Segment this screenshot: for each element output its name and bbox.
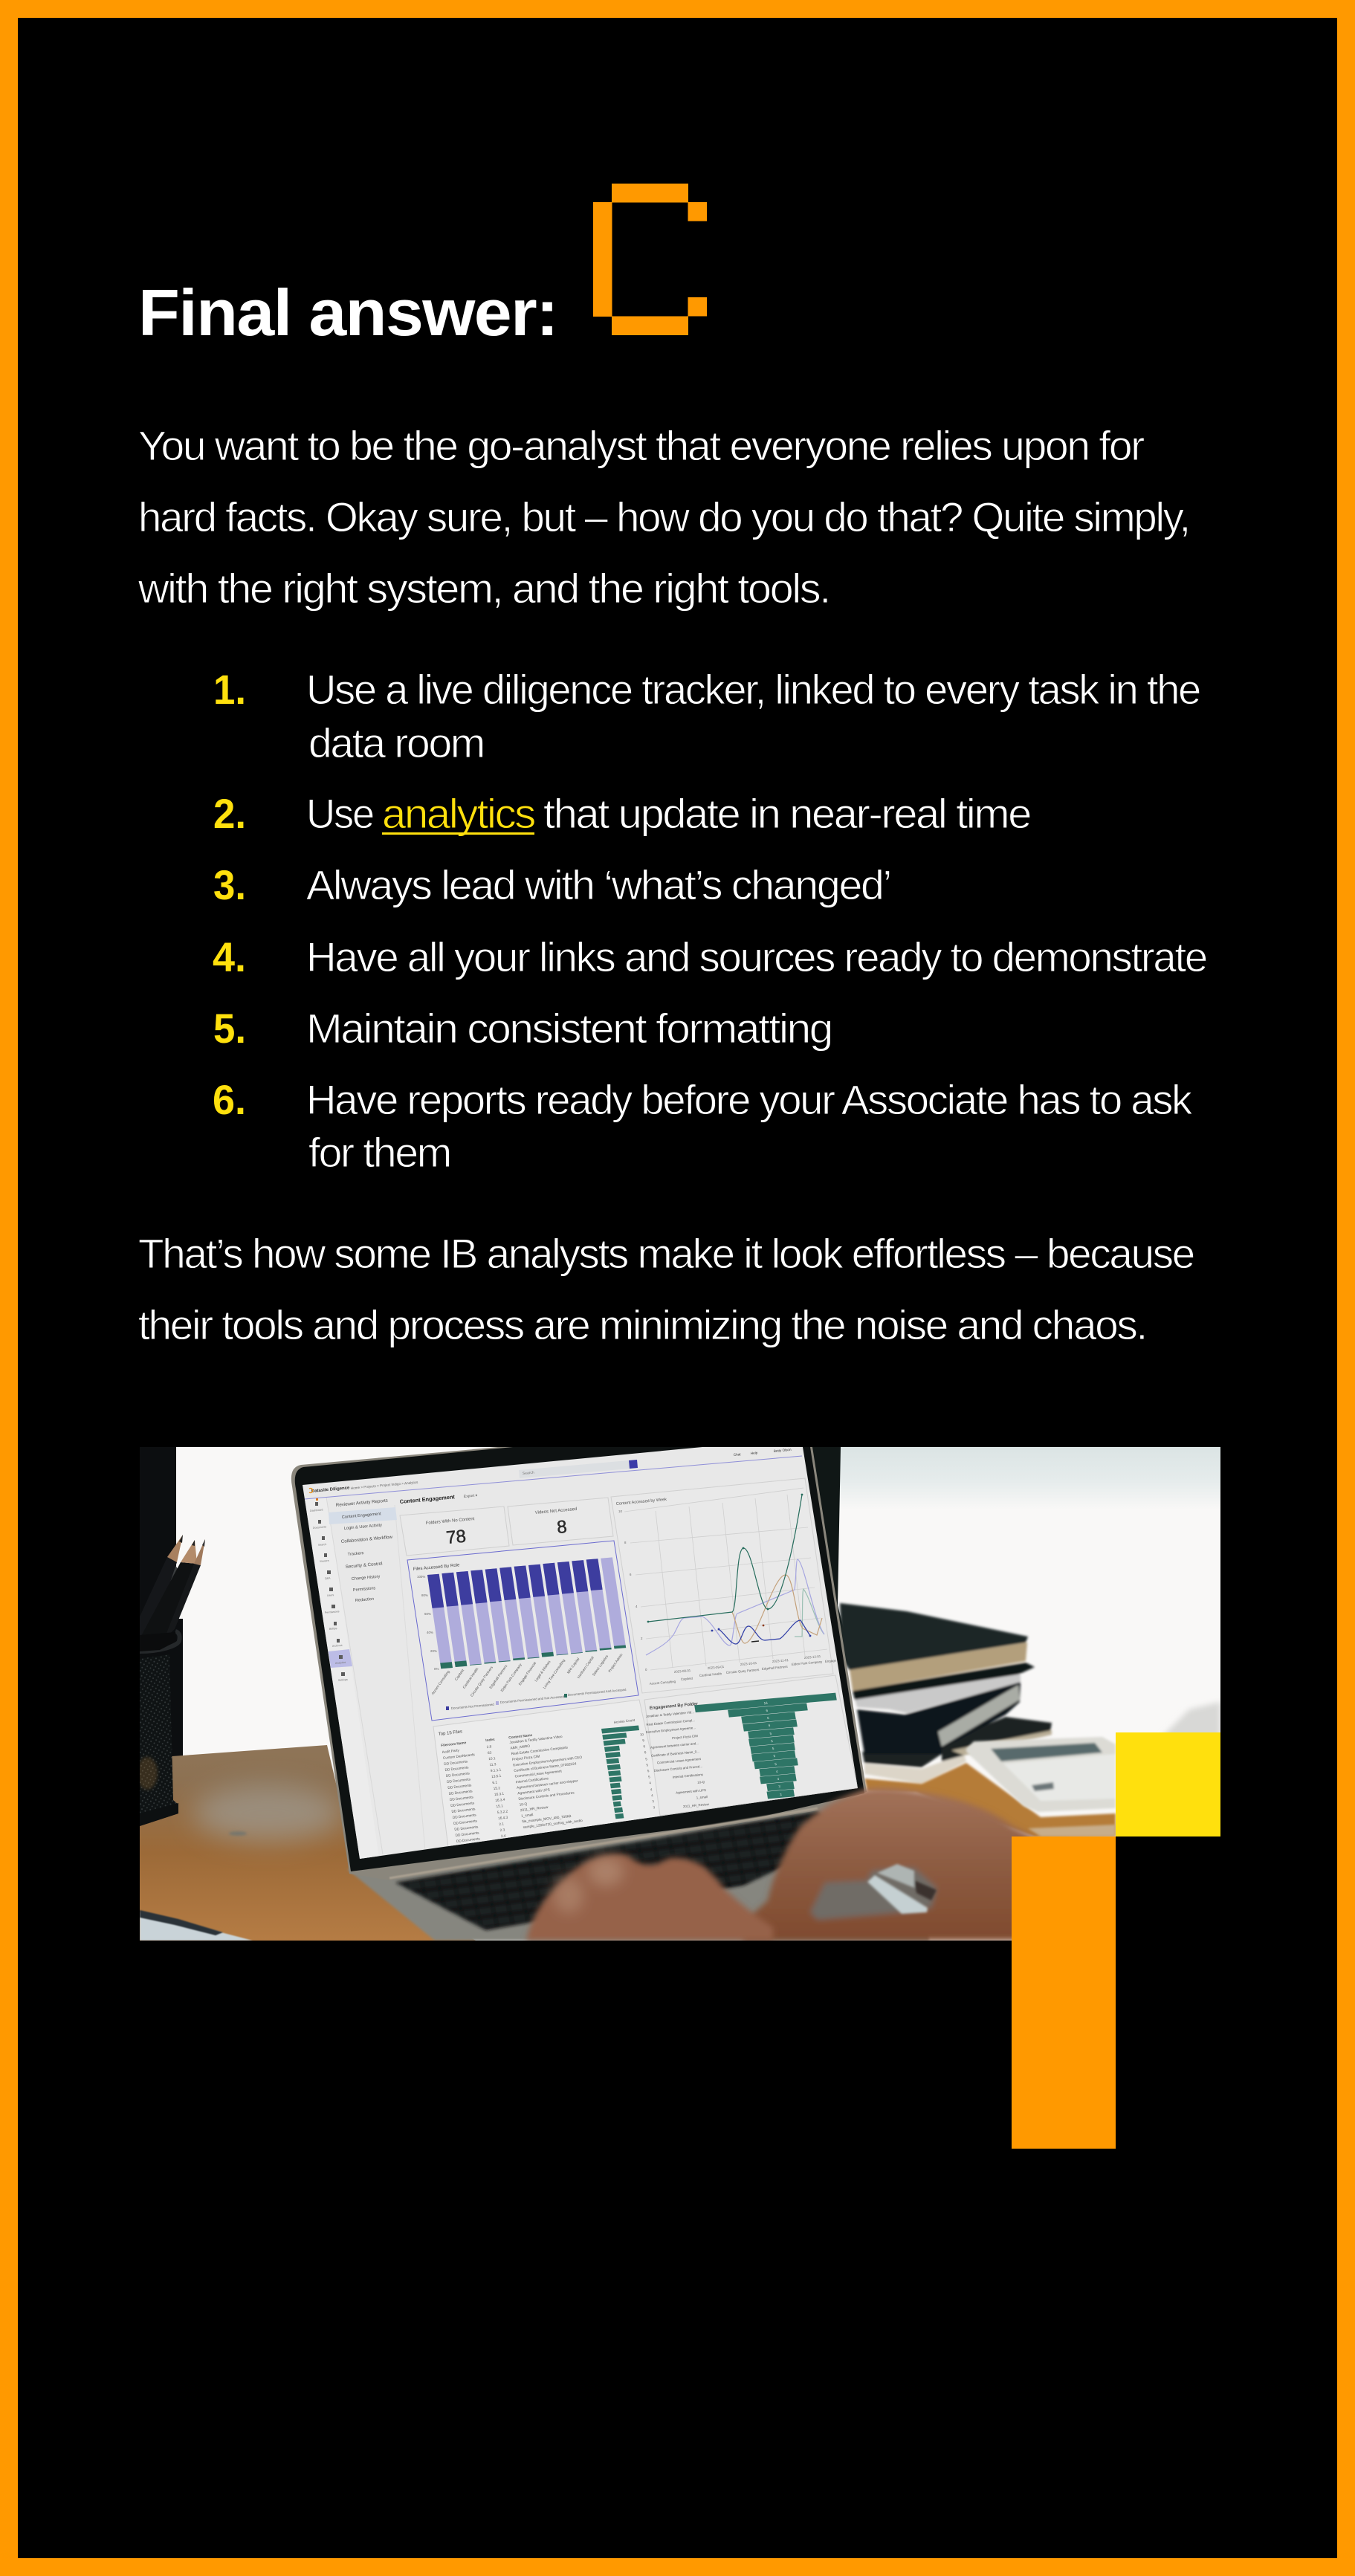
stacked bar chart: Files Accessed By Role: Documents Permissioned and Not Accessed (500, 1695, 565, 1704)
table: Top 15 Files: DD Documents (444, 1759, 468, 1767)
funnel chart: Engagement By Folder: Agreement with UPS (676, 1788, 706, 1795)
table: Top 15 Files: Agreement between carrier and shipper (517, 1779, 578, 1790)
KPI card: Folders With No Content 78: 78 (445, 1527, 467, 1548)
page title: Content Engagement: Export ▾ (464, 1493, 478, 1499)
funnel chart: Engagement By Folder: Internal Certifications (673, 1773, 704, 1779)
table: Top 15 Files (433, 1699, 664, 1846)
line chart: Content Accessed by Week: 2023-08-01 (674, 1669, 691, 1674)
table: Top 15 Files: DD Documents (455, 1831, 480, 1838)
stacked bar chart: Files Accessed By Role: Cardinal Health (462, 1667, 480, 1689)
table: Top 15 Files: sample_1280x720_surfing_with_audio (523, 1819, 583, 1830)
list item 4: 4. (213, 933, 246, 980)
table: Top 15 Files: file_example_MOV_480_700kB (522, 1814, 572, 1824)
table: Top 15 Files: 16.3.4 (495, 1798, 505, 1803)
funnel chart: Engagement By Folder: Certificate of Business Name_0... (651, 1750, 699, 1758)
list item 6 (213, 1076, 1193, 1176)
table: Top 15 Files: DD Documents (444, 1765, 470, 1773)
table: Top 15 Files: 6.1 (492, 1780, 498, 1785)
table: Top 15 Files: 2.4 (501, 1834, 506, 1839)
calculator (966, 1737, 1116, 1812)
dashboard sidebar: Analytics (335, 1661, 346, 1665)
list item 3: Always lead with ‘what’s changed’ (306, 861, 890, 908)
stacked bar chart: Files Accessed By Role: 60% (424, 1612, 431, 1616)
funnel chart: Engagement By Folder: 4 (776, 1770, 778, 1773)
table: Top 15 Files: 5 (646, 1763, 649, 1767)
title: Final answer: (138, 276, 557, 349)
stacked bar chart: Files Accessed By Role: 100% (417, 1575, 425, 1579)
line chart: Content Accessed by Week: Circular Quay Partners (726, 1668, 760, 1674)
table: Top 15 Files: Jonathan & Teddy Valentine Video (509, 1735, 563, 1745)
list item 2: Use (306, 790, 373, 837)
orange accent block (1012, 1836, 1116, 2149)
funnel chart: Engagement By Folder: 5 (774, 1762, 777, 1766)
photo: analyst using laptop with analytics dashboard (137, 1447, 1220, 1941)
yellow accent block (1116, 1732, 1220, 1836)
stacked bar chart: Files Accessed By Role: Legal & Wishes (534, 1660, 552, 1683)
table: Top 15 Files: 5 (645, 1757, 648, 1761)
table: Top 15 Files: Project Pizza CIM (512, 1755, 540, 1762)
table: Top 15 Files: Content Name (508, 1733, 533, 1741)
table: Top 15 Files: 4 (651, 1793, 653, 1797)
stacked bar chart: Files Accessed By Role: 0% (434, 1667, 439, 1671)
line chart: Content Accessed by Week: 4 (636, 1605, 638, 1608)
laptop base (347, 1795, 929, 1941)
laptop keyboard (395, 1811, 847, 1930)
pale tint at top of right window (840, 1447, 1220, 1498)
line chart: Content Accessed by Week: Engage (825, 1659, 837, 1663)
funnel chart: Engagement By Folder: Jonathan & Teddy Valentine Vid... (645, 1710, 694, 1718)
wooden desk left (140, 1745, 476, 1941)
closing paragraph (138, 1230, 1194, 1348)
dashboard sidebar: Collaboration & Workflow (341, 1535, 393, 1544)
funnel chart: Engagement By Folder: 4 (777, 1777, 780, 1781)
table: Top 15 Files: 6 (643, 1744, 646, 1748)
funnel chart: Engagement By Folder: 10-Q (697, 1780, 705, 1784)
stacked bar chart: Files Accessed By Role: 40% (427, 1631, 433, 1634)
list item 5: 5. (213, 1005, 246, 1052)
funnel chart: Engagement By Folder: Commercial Lease Agreement (657, 1757, 702, 1764)
table: Top 15 Files: 15.2 (493, 1786, 501, 1791)
list item 2: 2. (213, 790, 246, 837)
table: Top 15 Files: DD Documents (456, 1836, 481, 1844)
trackpad highlight (867, 1864, 937, 1914)
dashboard sidebar: Users (327, 1593, 334, 1597)
dashboard sidebar: Bitflips (329, 1627, 337, 1631)
dashboard sidebar: Security & Control (346, 1562, 383, 1570)
table: Top 15 Files: 16.4.3 (498, 1816, 508, 1821)
funnel chart: Engagement By Folder: 5 (772, 1747, 774, 1750)
line chart: Content Accessed by Week: Accent Consulting (650, 1680, 676, 1686)
funnel chart: Engagement By Folder: 3 (778, 1784, 781, 1788)
stacked bar chart: Files Accessed By Role: Project Admin (608, 1653, 624, 1674)
line chart: Content Accessed by Week: 2023-10-01 (740, 1661, 757, 1666)
table: Top 15 Files: 11.3 (489, 1762, 497, 1767)
dashboard sidebar: Content Engagement (342, 1512, 381, 1520)
page title: Content Engagement: Content Engagement (399, 1493, 456, 1505)
stacked bar chart: Files Accessed By Role: Select Logistics (592, 1654, 609, 1677)
table: Top 15 Files: 5 (647, 1769, 650, 1773)
table: Top 15 Files: DD Documents (447, 1777, 471, 1784)
list item 2: that update in near-real time (543, 790, 1030, 837)
table: Top 15 Files: 6 (644, 1750, 647, 1754)
KPI card: Videos Not Accessed 8: Videos Not Accessed (535, 1507, 578, 1515)
funnel chart: Engagement By Folder: 6 (767, 1716, 770, 1720)
table: Top 15 Files: DD Documents (450, 1801, 475, 1808)
table: Top 15 Files: Internal Certifications (515, 1776, 549, 1784)
dashboard screen content (305, 1448, 858, 1865)
KPI card: Videos Not Accessed 8: 8 (556, 1517, 568, 1538)
table: Top 15 Files: DD Documents (452, 1813, 477, 1820)
table: Top 15 Files: DD Documents (445, 1771, 470, 1779)
line chart: Content Accessed by Week: 2023-11-01 (772, 1658, 789, 1663)
dashboard header: Betty Olson (774, 1448, 792, 1453)
table: Top 15 Files: Executive Employment Agreement with CEO (513, 1755, 583, 1767)
table: Top 15 Files: 10 (640, 1732, 644, 1736)
stacked bar chart: Files Accessed By Role: 20% (430, 1649, 437, 1653)
dashboard sidebar: Change History (352, 1575, 381, 1582)
funnel chart: Engagement By Folder: 6 (766, 1709, 769, 1712)
funnel chart: Engagement By Folder: Agreement between carrier and... (650, 1741, 699, 1750)
stacked bar chart: Files Accessed By Role: Engage Financial (518, 1661, 537, 1686)
KPI card: Videos Not Accessed 8 (508, 1498, 613, 1545)
funnel chart: Engagement By Folder: 2011_HR_Review (683, 1802, 710, 1808)
typing hand: left (526, 1854, 773, 1941)
table: Top 15 Files: 9.1.1.1 (490, 1767, 502, 1773)
stacked bar chart: Files Accessed By Role: Elden Park Company (500, 1663, 523, 1693)
stacked bar chart: Files Accessed By Role: Edgehall Partners (488, 1664, 509, 1690)
dashboard sidebar: Documents (313, 1525, 326, 1530)
stacked bar chart: Files Accessed By Role: Circular Quay Partners (470, 1666, 494, 1698)
line chart: Content Accessed by Week: 6 (630, 1573, 632, 1576)
table: Top 15 Files: 9 (642, 1738, 645, 1742)
line chart: Content Accessed by Week: 2023-12-01 (804, 1654, 821, 1660)
stacked bar chart: Files Accessed By Role: Capitest (454, 1668, 465, 1682)
line chart: Content Accessed by Week: Capitest (681, 1676, 693, 1681)
table: Top 15 Files: 63 (488, 1750, 492, 1755)
funnel chart: Engagement By Folder: Project Pizza CIM (672, 1734, 698, 1740)
table: Top 15 Files: Commercial Lease Agreement (514, 1769, 563, 1779)
dashboard sidebar (305, 1497, 425, 1859)
table: Top 15 Files: Audit Party (442, 1748, 460, 1755)
cut-out: black corner below yellow block (1116, 1836, 1220, 1941)
closing paragraph: That’s how some IB analysts make it look effortless – because (138, 1230, 1194, 1277)
table: Top 15 Files: 15.1 (496, 1804, 504, 1809)
dashboard sidebar: Dashboard (310, 1508, 323, 1512)
table: Top 15 Files: DD Documents (447, 1783, 472, 1790)
funnel chart: Engagement By Folder: Executive Employment Agreeme... (646, 1726, 696, 1734)
table: Top 15 Files: Real Estate Commission Complaints (511, 1745, 569, 1756)
dashboard header (305, 1448, 802, 1499)
dashboard sidebar: Redaction (355, 1597, 374, 1603)
desk surface right (864, 1763, 1116, 1837)
table: Top 15 Files: 10-Q (519, 1802, 528, 1808)
dashboard sidebar: Permissions (325, 1610, 340, 1614)
table: Top 15 Files: 10.1 (488, 1756, 496, 1761)
stacked bar chart: Files Accessed By Role: Files Accessed By Role (413, 1563, 460, 1572)
table: Top 15 Files: Index (485, 1738, 495, 1743)
line chart: Content Accessed by Week: Content Accessed by Week (616, 1498, 667, 1507)
funnel chart: Engagement By Folder: 5 (773, 1754, 776, 1758)
table: Top 15 Files: DD Documents (448, 1789, 473, 1796)
stacked bar chart: Files Accessed By Role: Northern Capital (577, 1656, 595, 1680)
line chart: Content Accessed by Week: Edgehall Partners (762, 1665, 789, 1671)
icon: pixel letter C logo (593, 184, 707, 335)
line chart: Content Accessed by Week: 2023-09-01 (708, 1665, 725, 1670)
list item 3: 3. (213, 861, 246, 908)
dark post behind laptop (812, 1447, 844, 1644)
photo background: bright window (140, 1447, 1220, 1941)
KPI card: Folders With No Content 78: Folders With No Content (426, 1517, 475, 1526)
line chart: Content Accessed by Week: Cardinal Health (699, 1672, 722, 1677)
table: Top 15 Files: Access Count (614, 1718, 636, 1724)
typing hand: right (743, 1788, 1035, 1941)
line chart: Content Accessed by Week: 0 (645, 1668, 647, 1672)
dashboard header: Home > Projects > Project Indigo > Analytics (351, 1480, 418, 1490)
table: Top 15 Files: Top 15 Files (439, 1729, 462, 1737)
list item 2 (213, 790, 1030, 837)
dashboard sidebar: Search (318, 1543, 326, 1547)
table: Top 15 Files: 3 (652, 1799, 655, 1803)
table: Top 15 Files: Certificate of Business Name_07082024 (514, 1761, 577, 1773)
list item 6: 6. (213, 1076, 246, 1123)
funnel chart: Engagement By Folder: 16 (763, 1701, 768, 1705)
funnel chart: Engagement By Folder: 1_small (696, 1795, 708, 1799)
KPI card: Folders With No Content 78 (400, 1507, 509, 1556)
table: Top 15 Files: 13.5.1 (491, 1774, 502, 1779)
table: Top 15 Files: Disclosure Controls and Procedures (518, 1790, 575, 1802)
table: Top 15 Files: ABN_AMRO (510, 1744, 531, 1751)
stacked bar chart: Files Accessed By Role: Living Tree Consulting (543, 1658, 566, 1690)
table: Top 15 Files: 5.3.2.2 (497, 1809, 508, 1815)
soft shadow at right of window (1164, 1701, 1220, 1732)
table: Top 15 Files: DD Documents (451, 1807, 476, 1814)
list item 4: Have all your links and sources ready to demonstrate (306, 933, 1206, 980)
table: Top 15 Files: 4 (649, 1781, 652, 1784)
table: Top 15 Files: DD Documents (453, 1819, 478, 1826)
funnel chart: Engagement By Folder (644, 1675, 858, 1816)
dashboard header: Chat (734, 1452, 741, 1457)
dashboard sidebar: Reviewer Activity Reports (336, 1498, 388, 1508)
table: Top 15 Files: Fileroom Name (441, 1741, 467, 1748)
line chart: Content Accessed by Week: 10 (618, 1509, 622, 1513)
closing paragraph: their tools and process are minimizing the noise and chaos. (138, 1301, 1146, 1348)
funnel chart: Engagement By Folder: 6 (768, 1724, 771, 1727)
dashboard sidebar: Permissions (353, 1586, 376, 1593)
list item 1 (213, 666, 1200, 766)
laptop lid rim (291, 1447, 867, 1880)
dashboard header: Datasite Diligence (311, 1486, 350, 1494)
dashboard sidebar: Q&A (325, 1576, 331, 1580)
table: Top 15 Files: 5 (648, 1775, 650, 1779)
table: Top 15 Files: 16.3.1 (494, 1792, 505, 1797)
list item 1: Use a live diligence tracker, linked to every task in the (306, 666, 1200, 713)
laptop bezel (295, 1447, 864, 1871)
stack of books (840, 1603, 1052, 1784)
table: Top 15 Files: 2011_HR_Review (520, 1805, 549, 1813)
funnel chart: Engagement By Folder: Real Estate Commission Compl... (646, 1718, 695, 1726)
pencil cup with pencils (137, 1535, 205, 1826)
funnel chart: Engagement By Folder: 3 (780, 1793, 783, 1796)
stacked bar chart: Files Accessed By Role: MRI Capital (566, 1657, 581, 1675)
page title: Content Engagement (400, 1494, 477, 1504)
dashboard sidebar: Trackers (348, 1551, 364, 1557)
line chart: Content Accessed by Week: 2 (641, 1637, 643, 1640)
list item 5: Maintain consistent formatting (306, 1005, 832, 1052)
funnel chart: Engagement By Folder: 5 (769, 1732, 772, 1735)
table: Top 15 Files: 1_small (521, 1813, 534, 1819)
line chart: Content Accessed by Week: 8 (624, 1541, 627, 1544)
list item 1: 1. (213, 666, 246, 713)
dark window frame at left (140, 1447, 183, 1758)
table: Top 15 Files: 2.1 (499, 1822, 505, 1827)
dashboard sidebar: Viewers (320, 1559, 329, 1563)
stacked bar chart: Files Accessed By Role: Accent Consulting (431, 1669, 451, 1696)
stacked bar chart: Files Accessed By Role (407, 1541, 638, 1721)
stacked bar chart: Files Accessed By Role: 80% (421, 1593, 428, 1597)
table: Top 15 Files: 2.3 (499, 1828, 505, 1833)
dashboard header: Search (523, 1471, 534, 1476)
dashboard sidebar: Login & User Activity (344, 1523, 382, 1531)
list item 2: analytics (382, 790, 534, 837)
table: Top 15 Files: 3 (653, 1805, 656, 1809)
table: Top 15 Files: 2.8 (486, 1744, 492, 1750)
table: Top 15 Files: DD Documents (450, 1795, 474, 1802)
numbered list (213, 666, 1206, 1176)
dashboard header: Help (751, 1451, 758, 1455)
list item 6: Have reports ready before your Associate has to ask (306, 1076, 1193, 1123)
list item 1: data room (308, 719, 484, 766)
funnel chart: Engagement By Folder: 5 (771, 1739, 774, 1743)
laptop screen (303, 1447, 858, 1859)
stacked bar chart: Files Accessed By Role: Documents Permissioned And Accessed (568, 1688, 627, 1697)
intro paragraph: You want to be the go-analyst that everyone relies upon for (138, 422, 1145, 469)
table: Top 15 Files: DD Documents (454, 1825, 479, 1832)
dashboard sidebar: Settings (338, 1678, 348, 1682)
funnel chart: Engagement By Folder: Engagement By Folder (650, 1702, 699, 1711)
table: Top 15 Files: Agreement with UPS (517, 1787, 550, 1796)
line chart: Content Accessed by Week (611, 1478, 837, 1693)
intro paragraph (138, 422, 1189, 612)
intro paragraph: hard facts. Okay sure, but – how do you do that? Quite simply, (138, 493, 1189, 540)
line chart: Content Accessed by Week: Elden Park Company (792, 1660, 823, 1666)
table: Top 15 Files: Custom Dashboards (443, 1753, 476, 1761)
intro paragraph: with the right system, and the right tools. (138, 565, 830, 612)
silver lip below the bezel (389, 1808, 818, 1878)
table: Top 15 Files: 4 (650, 1787, 653, 1791)
list item 6: for them (308, 1129, 450, 1176)
funnel chart: Engagement By Folder: Disclosure Controls and Proced... (654, 1764, 702, 1773)
stacked bar chart: Files Accessed By Role: Documents Not Permissioned (451, 1703, 494, 1710)
dashboard sidebar: Archives (332, 1644, 343, 1648)
